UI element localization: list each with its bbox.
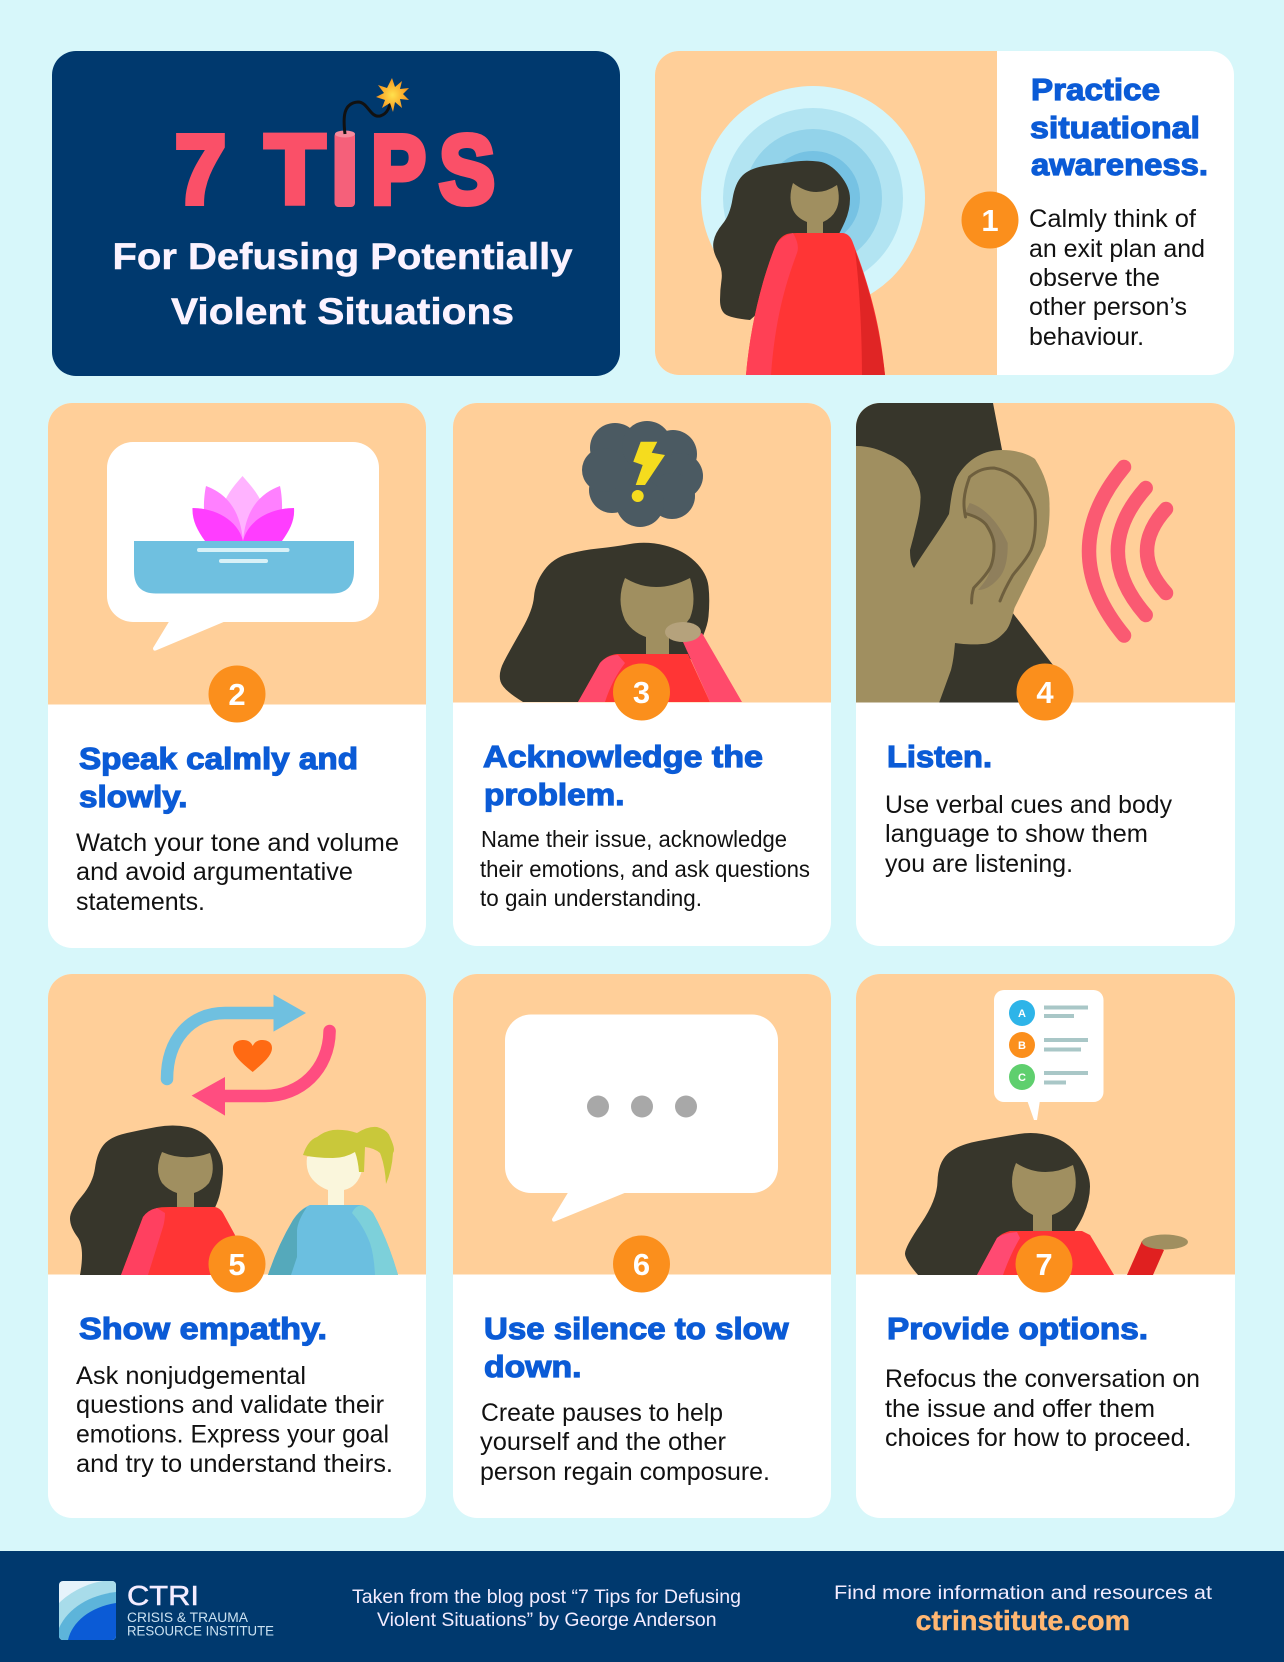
- body text: Calmly think of: [1029, 205, 1196, 233]
- heading: 7 tips: I: [338, 115, 352, 224]
- body text: [480, 1399, 770, 1486]
- body text: an exit plan and: [1029, 235, 1205, 263]
- panel: tip 3 acknowledge: [453, 403, 831, 946]
- icon: exchange arrows and heart: [167, 994, 330, 1116]
- heading: Provide options.: [887, 1311, 1148, 1346]
- heading: down.: [484, 1349, 582, 1384]
- source credit: Taken from the blog post “7 Tips for Defusing: [352, 1586, 741, 1608]
- panel: tip 6 use silence: [453, 974, 831, 1518]
- icon: sound waves: [1089, 467, 1166, 636]
- body text: and try to understand theirs.: [76, 1450, 393, 1478]
- badge 2: 2: [228, 677, 246, 712]
- subtitle: For Defusing Potentially: [112, 236, 573, 277]
- body text: choices for how to proceed.: [885, 1424, 1192, 1452]
- body text: Use verbal cues and body: [885, 791, 1172, 819]
- illustration: woman: [713, 161, 885, 375]
- body text: Ask nonjudgemental: [76, 1362, 306, 1390]
- body text: person regain composure.: [480, 1458, 770, 1486]
- logo wordmark: [127, 1580, 274, 1638]
- icon: options bubble: C: [1018, 1072, 1026, 1084]
- body text: and avoid argumentative: [76, 858, 353, 886]
- heading: practice situational awareness: awareness.: [1031, 147, 1208, 182]
- badge 7: 7: [1035, 1247, 1053, 1282]
- badge 5: [208, 1236, 266, 1292]
- icon: dynamite fuse and spark: [334, 78, 409, 207]
- heading: 7 tips: 7: [175, 115, 226, 224]
- heading: 7 tips: P: [371, 115, 426, 224]
- panel: tip 7 provide options: [856, 974, 1235, 1518]
- body text: Watch your tone and volume: [76, 829, 399, 857]
- illustration: ear and hair: [856, 403, 1053, 703]
- panel: tip 5 show empathy: [48, 974, 426, 1518]
- website call to action: ctrinstitute.com: [916, 1605, 1130, 1636]
- website call to action: [834, 1582, 1213, 1636]
- badge 4: 4: [1036, 675, 1054, 710]
- heading: Speak calmly and: [79, 741, 358, 776]
- panel: tip 2 speak calmly: [48, 403, 426, 948]
- body text: [885, 1365, 1200, 1452]
- logo wordmark: CRISIS & TRAUMA: [127, 1610, 248, 1625]
- badge 3: 3: [633, 675, 650, 710]
- icon: options bubble: A: [1018, 1008, 1026, 1020]
- body text: [76, 829, 399, 916]
- heading: 7 tips: S: [439, 115, 495, 224]
- body text: [885, 791, 1172, 878]
- icon: speech bubble with lotus: [107, 442, 379, 651]
- logo mark: [59, 1581, 116, 1640]
- heading: Show empathy.: [79, 1311, 327, 1346]
- body text: observe the: [1029, 264, 1160, 292]
- badge 3: [613, 664, 670, 720]
- icon: awareness rings: [701, 86, 925, 310]
- body text: to gain understanding.: [480, 885, 702, 911]
- heading: [483, 739, 763, 812]
- logo wordmark: RESOURCE INSTITUTE: [127, 1624, 274, 1638]
- icon: speech bubble with dots: [505, 1014, 778, 1222]
- panel: title: [52, 51, 620, 376]
- source credit: Violent Situations” by George Anderson: [377, 1609, 716, 1631]
- body text: emotions. Express your goal: [76, 1420, 389, 1448]
- body text: Name their issue, acknowledge: [481, 826, 787, 852]
- badge 7: [1016, 1236, 1072, 1292]
- body text: language to show them: [885, 820, 1148, 848]
- icon: thought cloud with bolt: [582, 421, 703, 527]
- body text: behaviour.: [1029, 323, 1144, 351]
- footer band: [0, 1551, 1284, 1662]
- heading: Listen.: [887, 739, 992, 774]
- body text: [480, 826, 810, 911]
- body text: questions and validate their: [76, 1391, 384, 1419]
- heading: 7 tips: [175, 115, 495, 224]
- subtitle: [112, 236, 573, 332]
- body text: statements.: [76, 888, 205, 916]
- body text: yourself and the other: [480, 1428, 726, 1456]
- badge 6: [613, 1236, 670, 1292]
- subtitle: Violent Situations: [171, 291, 514, 332]
- heading: practice situational awareness: Practice: [1031, 72, 1160, 107]
- heading: Acknowledge the: [483, 739, 763, 774]
- badge 2: [208, 666, 266, 722]
- badge 5: 5: [228, 1247, 246, 1282]
- badge 1: 1: [981, 203, 999, 238]
- badge 4: [1016, 664, 1074, 720]
- heading: Use silence to slow: [484, 1311, 789, 1346]
- body text: the issue and offer them: [885, 1395, 1155, 1423]
- heading: 7 tips: T: [265, 115, 325, 224]
- illustration: thinking woman: [500, 543, 742, 702]
- heading: slowly.: [79, 779, 188, 814]
- source credit: [352, 1586, 741, 1631]
- heading: [484, 1311, 789, 1384]
- logo wordmark: CTRI: [127, 1580, 199, 1611]
- illustration: woman: [70, 1126, 250, 1275]
- illustration: woman offering: [905, 1133, 1188, 1275]
- body text: you are listening.: [885, 850, 1073, 878]
- panel: tip 1 situational awareness: [655, 51, 1234, 375]
- badge 1: [962, 192, 1018, 248]
- badge 6: 6: [633, 1247, 650, 1282]
- illustration: second person: [268, 1127, 398, 1275]
- heading: practice situational awareness: situational: [1030, 110, 1200, 145]
- website call to action: Find more information and resources at: [834, 1582, 1213, 1604]
- body text: [76, 1362, 393, 1478]
- icon: options bubble: [994, 990, 1104, 1120]
- heading: practice situational awareness: [1030, 72, 1208, 182]
- icon: options bubble: B: [1018, 1040, 1026, 1052]
- panel: tip 4 listen: [856, 403, 1235, 946]
- body text: their emotions, and ask questions: [480, 856, 810, 882]
- heading: [79, 741, 358, 814]
- heading: problem.: [484, 777, 624, 812]
- body text: other person’s: [1029, 293, 1187, 321]
- body text: Refocus the conversation on: [885, 1365, 1200, 1393]
- body text: [1029, 205, 1205, 351]
- body text: Create pauses to help: [481, 1399, 723, 1427]
